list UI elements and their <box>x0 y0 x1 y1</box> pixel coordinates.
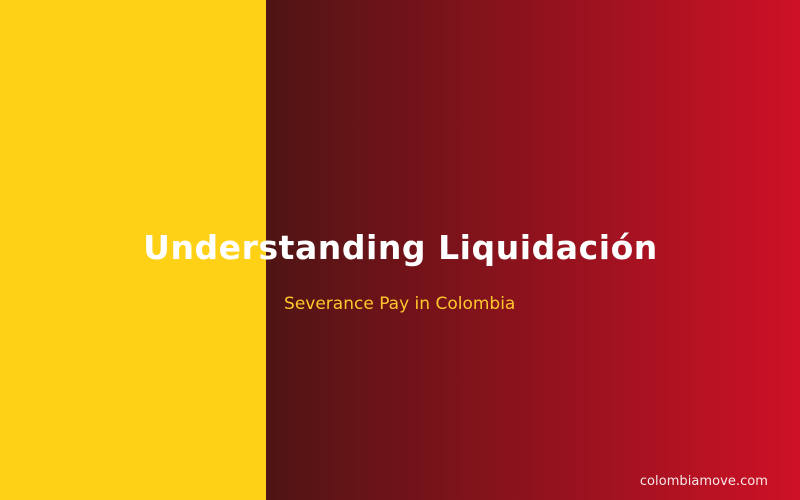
panel: dark red gradient band <box>266 0 800 500</box>
website credit: colombiamove.com <box>640 474 768 489</box>
subtitle: Severance Pay in Colombia <box>284 294 515 314</box>
title: Understanding Liquidación <box>143 228 658 267</box>
panel: yellow left band <box>0 0 266 500</box>
